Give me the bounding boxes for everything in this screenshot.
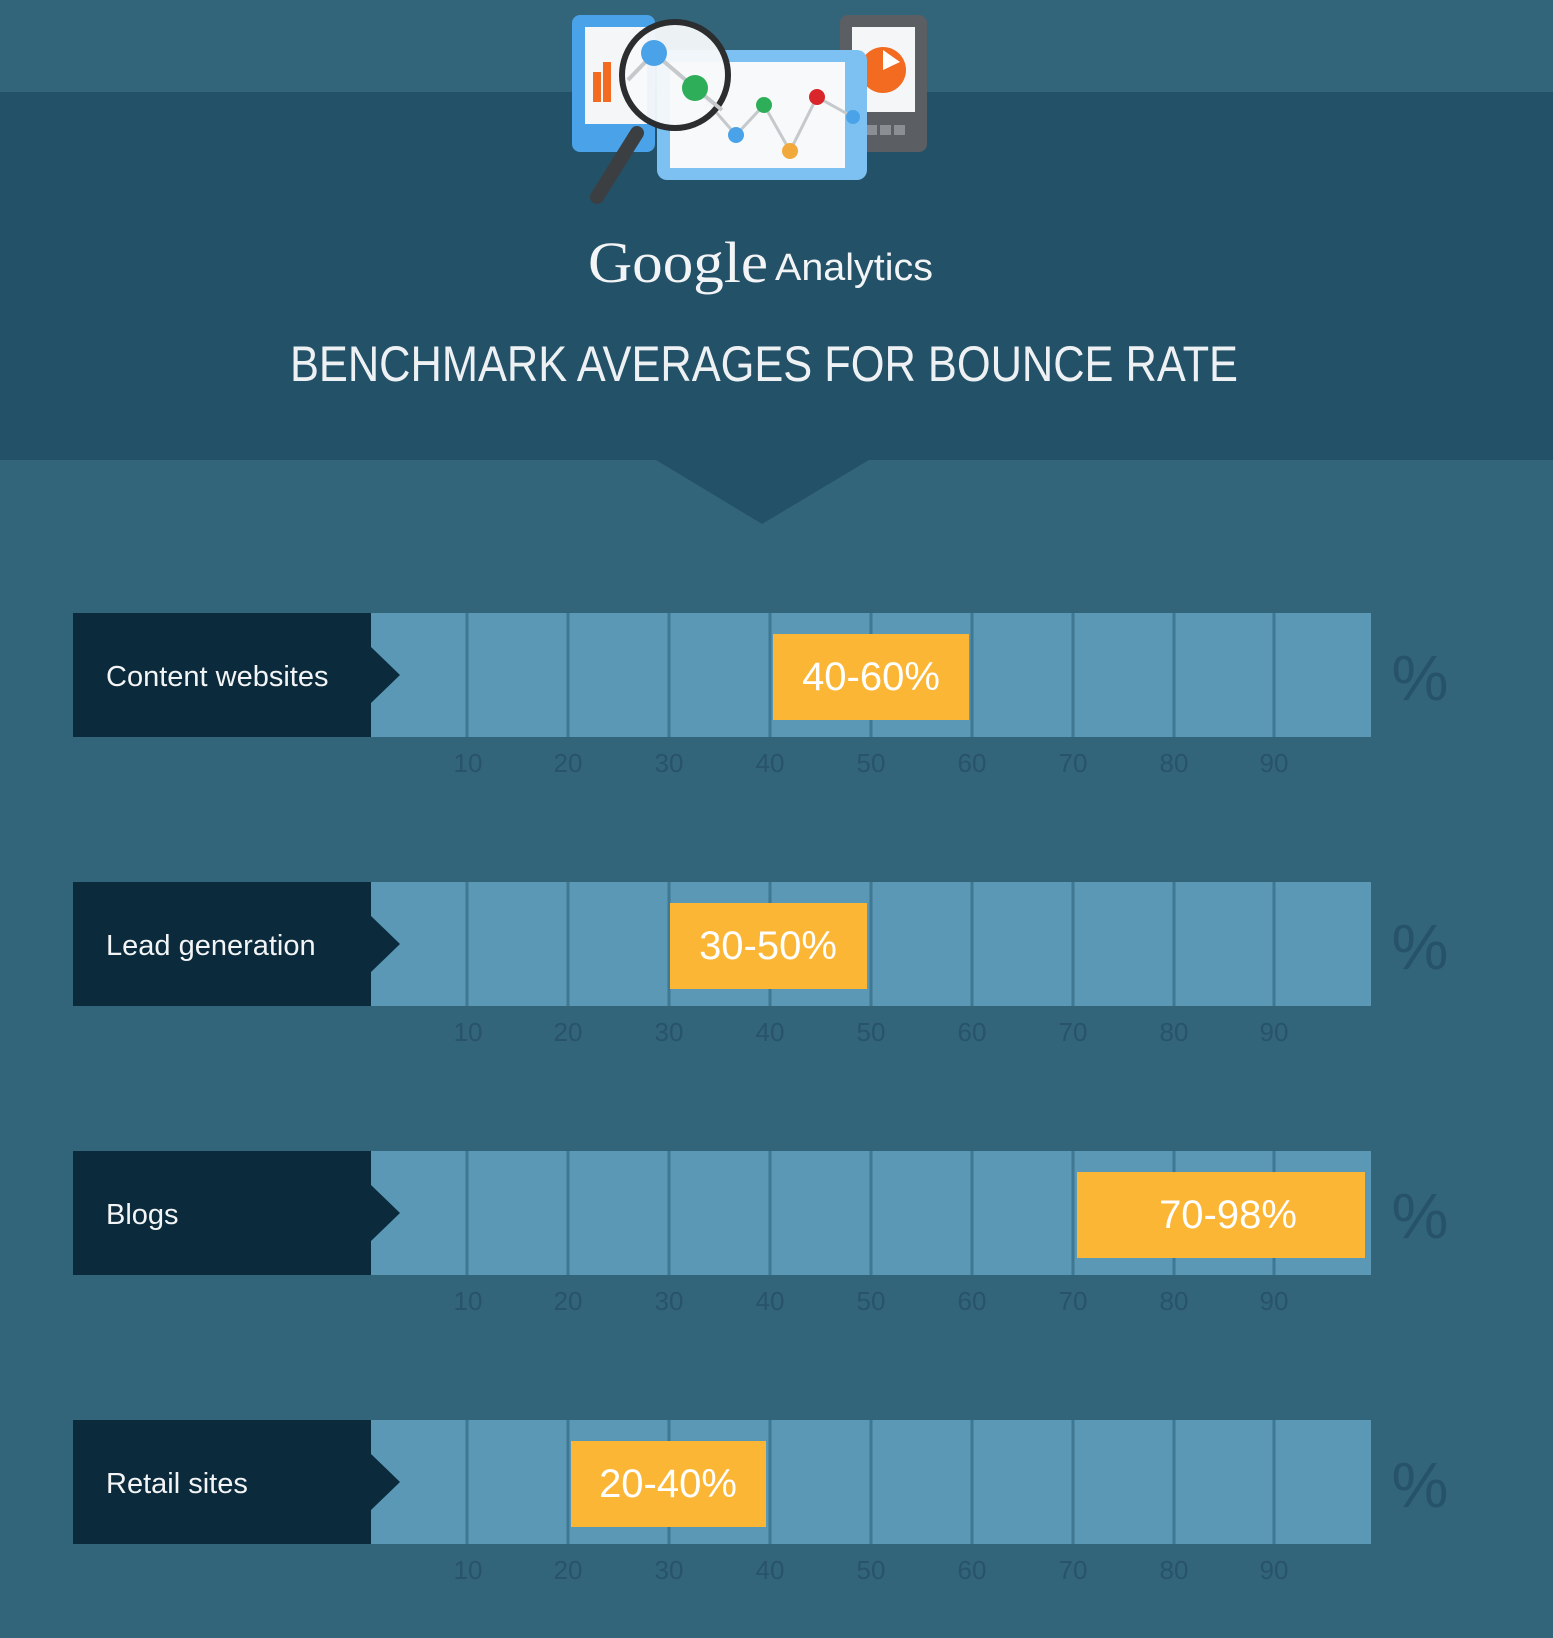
row: Lead generation: 20	[554, 1017, 582, 1047]
row: Lead generation: 30-50%	[699, 924, 837, 968]
row: Retail sites: 30	[655, 1555, 683, 1585]
row: Content websites	[73, 613, 1448, 778]
row: Content websites: Content websites	[106, 661, 328, 693]
logo: Google Analytics: Analytics	[775, 247, 933, 289]
row: Content websites: 90	[1260, 748, 1288, 778]
row: Content websites: 80	[1160, 748, 1188, 778]
logo: Google Analytics	[588, 230, 933, 295]
row: Content websites: 60	[958, 748, 986, 778]
row: Content websites: 70	[1059, 748, 1087, 778]
logo: Google Analytics: Google	[588, 230, 768, 295]
row: Retail sites: 70	[1059, 1555, 1087, 1585]
row: Content websites: 10	[454, 748, 482, 778]
row: Blogs: 90	[1260, 1286, 1288, 1316]
row: Blogs: 70	[1059, 1286, 1087, 1316]
row: Retail sites: %	[1392, 1449, 1448, 1521]
row: Blogs: 70-98%	[1159, 1193, 1297, 1237]
row: Content websites: 20	[554, 748, 582, 778]
row: Retail sites: 10	[454, 1555, 482, 1585]
row: Retail sites: 40	[756, 1555, 784, 1585]
row: Lead generation: 70	[1059, 1017, 1087, 1047]
row: Content websites: 40-60%	[802, 655, 940, 699]
row: Lead generation	[73, 882, 1448, 1047]
row: Blogs: 50	[857, 1286, 885, 1316]
row: Retail sites: 60	[958, 1555, 986, 1585]
row: Lead generation: 80	[1160, 1017, 1188, 1047]
row: Blogs: 80	[1160, 1286, 1188, 1316]
row: Retail sites: 20-40%	[599, 1462, 737, 1506]
row: Blogs	[73, 1151, 1448, 1316]
title: BENCHMARK AVERAGES FOR BOUNCE RATE	[290, 336, 1238, 392]
row: Blogs: 10	[454, 1286, 482, 1316]
row: Lead generation: 10	[454, 1017, 482, 1047]
row: Retail sites: Retail sites	[106, 1468, 248, 1500]
row: Content websites: 30	[655, 748, 683, 778]
row: Retail sites	[73, 1420, 1448, 1585]
row: Retail sites: 90	[1260, 1555, 1288, 1585]
row: Lead generation: Lead generation	[106, 930, 316, 962]
row: Blogs: Blogs	[106, 1199, 179, 1231]
row: Retail sites: 80	[1160, 1555, 1188, 1585]
icon: analytics devices	[572, 15, 927, 197]
row: Lead generation: 30	[655, 1017, 683, 1047]
row: Content websites: 40	[756, 748, 784, 778]
row: Lead generation: 40	[756, 1017, 784, 1047]
row: Blogs: %	[1392, 1180, 1448, 1252]
row: Lead generation: 60	[958, 1017, 986, 1047]
row: Blogs: 40	[756, 1286, 784, 1316]
row: Blogs: 20	[554, 1286, 582, 1316]
row: Content websites: %	[1392, 642, 1448, 714]
row: Retail sites: 20	[554, 1555, 582, 1585]
row: Lead generation: 90	[1260, 1017, 1288, 1047]
header band	[0, 92, 1553, 524]
row: Blogs: 30	[655, 1286, 683, 1316]
row: Lead generation: %	[1392, 911, 1448, 983]
row: Retail sites: 50	[857, 1555, 885, 1585]
row: Content websites: 50	[857, 748, 885, 778]
row: Lead generation: 50	[857, 1017, 885, 1047]
row: Blogs: 60	[958, 1286, 986, 1316]
